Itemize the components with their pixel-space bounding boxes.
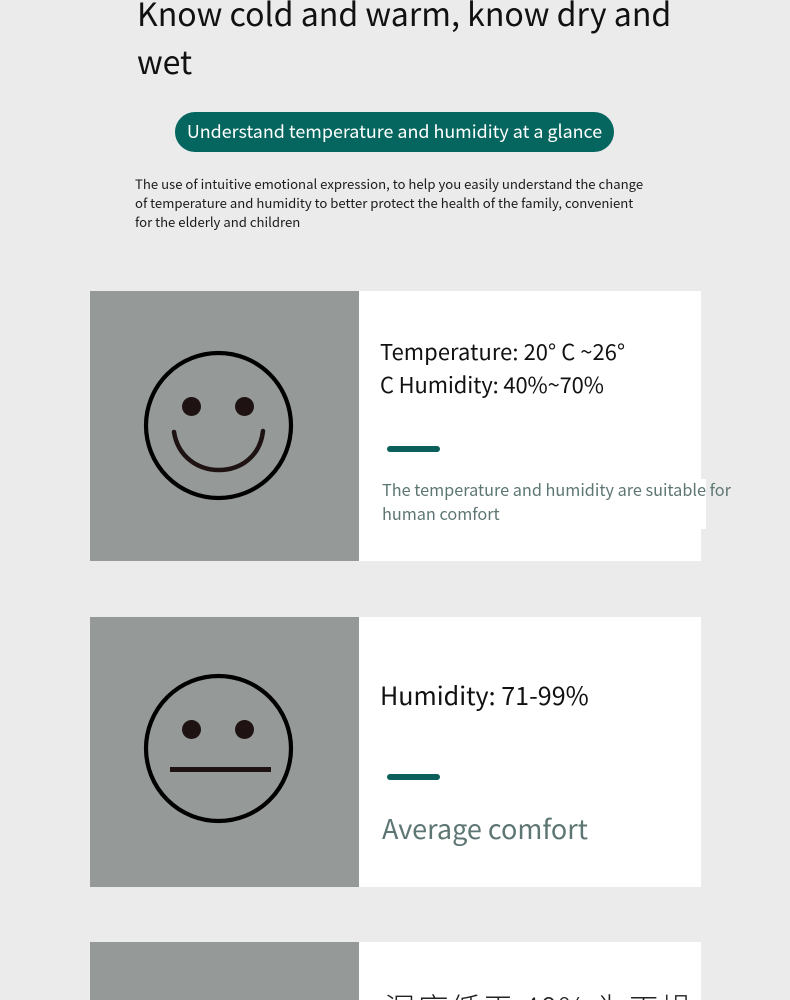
intro text: [135, 174, 643, 231]
icon: smiling face: [90, 291, 359, 561]
description: The temperature and humidity are suitable for: [382, 477, 731, 501]
subtitle pill: [175, 112, 614, 152]
description: human comfort: [382, 501, 500, 525]
description: Average comfort: [382, 808, 588, 847]
white text patch: [430, 479, 706, 529]
panel: average: [90, 617, 701, 887]
panel: dry: [90, 942, 701, 1000]
reading: temperature and humidity: C Humidity: 40%~70%: [380, 369, 604, 400]
intro text: The use of intuitive emotional expression, to help you easily understand the change: [135, 174, 643, 193]
intro text: of temperature and humidity to better protect the health of the family, convenient: [135, 193, 633, 212]
icon: neutral face: [90, 617, 359, 887]
reading: temperature and humidity: Temperature: 20° C ~26°: [380, 336, 625, 367]
title: wet: [137, 38, 192, 84]
panel: comfortable: [90, 291, 701, 561]
accent bar: [387, 774, 440, 780]
accent bar: [387, 446, 440, 452]
reading: humidity: Humidity: 71-99%: [380, 677, 589, 713]
description: [382, 477, 731, 525]
icon tile: [90, 942, 359, 1000]
title: [137, 0, 671, 84]
intro text: for the elderly and children: [135, 212, 300, 231]
subtitle pill: Understand temperature and humidity at a glance: [187, 118, 602, 144]
reading: temperature and humidity: [380, 336, 625, 400]
